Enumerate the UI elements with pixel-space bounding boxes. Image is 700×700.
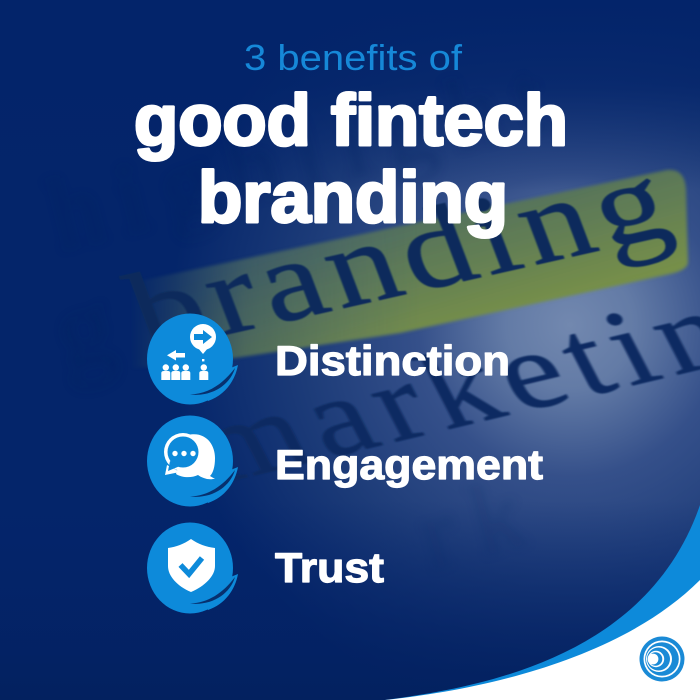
label: Distinction: Distinction [275,337,510,384]
intro heading: 3 benefits of [244,37,463,78]
benefit: Trust [147,522,384,614]
title [134,81,568,238]
icon: chat bubbles [147,416,238,506]
background photo: highlighted dictionary words: highlight [38,37,573,271]
logo: spiral [640,636,684,682]
label: Engagement: Engagement [275,441,543,488]
label: Trust: Trust [275,544,384,591]
corner swoosh [385,505,700,700]
icon: people with speech bubble [147,314,238,404]
background photo: highlighted dictionary words: g [45,263,124,393]
icon: shield with check [147,522,238,614]
title: good fintech [134,81,568,161]
background photo: highlighted dictionary words: rk [407,452,555,591]
benefit: Distinction [147,314,510,404]
background photo: highlighted dictionary words: branding [111,134,692,376]
benefit: Engagement [147,416,543,506]
title: branding [198,158,508,238]
